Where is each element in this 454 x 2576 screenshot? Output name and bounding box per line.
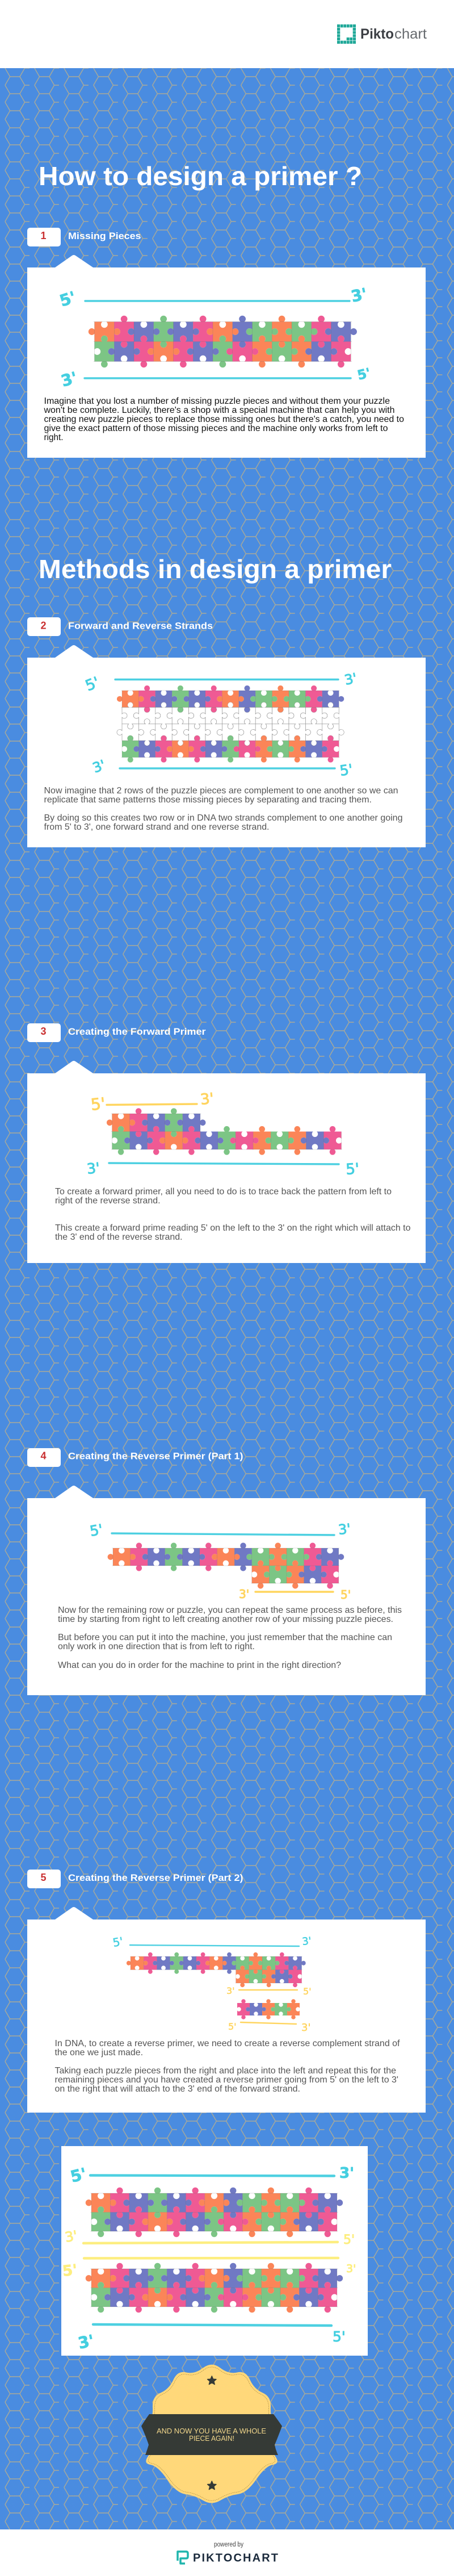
number badge 1: 1	[40, 230, 47, 241]
label 5 prime top left: 5'	[83, 674, 102, 695]
dashed stitching on seal	[148, 2367, 275, 2500]
strand line bottom	[85, 377, 351, 379]
strand line cyan	[130, 1945, 299, 1946]
primer line yellow	[255, 1591, 333, 1593]
label 3 prime yellow: 3'	[226, 1985, 235, 1996]
strand line cyan	[109, 1163, 339, 1164]
label 3 prime cyan: 3'	[338, 1521, 351, 1538]
description text	[44, 786, 403, 832]
icon: star bottom	[208, 2481, 216, 2490]
description text	[58, 1605, 402, 1670]
description text	[55, 1187, 411, 1242]
panel card	[61, 2146, 368, 2356]
label 5 prime top left: 5'	[69, 2164, 89, 2186]
wordmark: chart	[394, 26, 427, 42]
puzzle rows	[108, 1542, 344, 1589]
reversed primer pieces	[237, 1999, 300, 2019]
title: Methods in design a primer: Methods in design a primer	[39, 554, 392, 584]
strand line yellow lower	[84, 2257, 338, 2260]
title: How to design a primer: How to design a primer ?	[39, 161, 362, 191]
panel: creating the reverse primer part 2	[27, 1907, 426, 2113]
primer line yellow	[107, 1104, 197, 1105]
strand line top cyan	[90, 2175, 334, 2176]
PIKTOCHART wordmark: PIKTOCHART	[193, 2552, 278, 2565]
section 2 header	[27, 617, 213, 636]
number badge 2	[27, 617, 61, 636]
section 1 header	[27, 228, 141, 246]
description text: By doing so this creates two row or in DNA two strands complement to one another going	[44, 813, 403, 823]
badge message	[157, 2427, 266, 2443]
label 5 prime bottom right: 5'	[339, 761, 354, 779]
label 5 prime yellow: 5'	[340, 1588, 351, 1601]
description text: In DNA, to create a reverse primer, we need to create a reverse complement strand of	[54, 2039, 400, 2048]
label 3 prime top right: 3'	[350, 285, 369, 306]
puzzle diagram: forward primer	[86, 1090, 360, 1178]
label 5 prime cyan: 5'	[89, 1521, 104, 1540]
label 3 prime yellow: 3'	[239, 1587, 249, 1601]
description text: the 3' end of the reverse strand.	[55, 1232, 183, 1242]
header Piktochart logo	[337, 24, 427, 44]
number badge 2: 2	[40, 620, 47, 632]
label 5 prime top left: 5'	[57, 288, 78, 311]
icon: star top	[208, 2376, 216, 2385]
description text: the one we just made.	[54, 2048, 143, 2058]
strand line top	[85, 300, 350, 302]
label 5 prime yellow: 5'	[303, 1986, 312, 1997]
primer line yellow	[239, 1989, 297, 1990]
number badge 3	[27, 1023, 61, 1042]
final badge	[141, 2365, 282, 2503]
label 3 prime bottom left: 3'	[59, 368, 79, 391]
number badge 4: 4	[40, 1450, 47, 1462]
label 5 prime yellow: 5'	[90, 1094, 106, 1114]
strand line bottom cyan	[93, 2324, 331, 2326]
label 5 prime cyan: 5'	[112, 1934, 124, 1950]
white traced puzzle rows	[117, 702, 344, 746]
puzzle rows upper	[86, 2188, 343, 2237]
number badge 1	[27, 228, 61, 246]
icon: Piktochart P mark	[178, 2552, 188, 2564]
description text: only work in one direction that is from left to right.	[58, 1642, 255, 1651]
badge message: AND NOW YOU HAVE A WHOLE	[157, 2427, 266, 2435]
dark ribbon band	[141, 2414, 282, 2455]
label 3 prime top right: 3'	[339, 2165, 354, 2182]
coloured puzzle rows	[117, 685, 344, 763]
label 5 prime bottom right: 5'	[356, 366, 372, 383]
number badge 4	[27, 1448, 61, 1467]
label 3 prime cyan: 3'	[301, 1935, 312, 1948]
strand line yellow upper	[83, 2242, 338, 2243]
panel card with pointer	[27, 645, 426, 847]
footer: powered by Piktochart	[178, 2541, 278, 2565]
description text: won't be complete. Luckily, there's a shop with a special machine that can help you with	[43, 405, 395, 415]
panel: forward and reverse strands	[27, 645, 426, 847]
number badge 5: 5	[40, 1872, 47, 1883]
description text: replicate that same patterns those missing pieces by separating and tracing them.	[44, 795, 372, 805]
puzzle diagram: reverse complement	[112, 1934, 312, 2034]
panel: creating the forward primer	[27, 1061, 426, 1263]
label 3 prime top right: 3'	[343, 670, 359, 688]
section 3 header	[27, 1023, 206, 1042]
panel card with pointer	[27, 1907, 426, 2113]
label 5 prime bottom right: 5'	[333, 2328, 346, 2345]
strand line bottom	[120, 767, 335, 770]
description text: from 5' to 3', one forward strand and one reverse strand.	[44, 822, 269, 832]
description text: But before you can put it into the machine, you just remember that the machine can	[58, 1633, 392, 1642]
label 3 prime yellow: 3'	[200, 1090, 215, 1109]
section 1 heading: Missing Pieces	[68, 231, 141, 241]
label 5 prime yellow lower: 5'	[62, 2261, 78, 2280]
description text: remaining pieces and you have created a reverse primer going from 5' on the left to 3'	[54, 2075, 398, 2085]
label 5 prime yellow: 5'	[343, 2233, 355, 2247]
yellow scalloped seal	[145, 2365, 278, 2503]
description text: Now imagine that 2 rows of the puzzle pieces are complement to one another so we can	[44, 786, 398, 796]
label 3 prime bottom left: 3'	[90, 757, 108, 776]
powered by: powered by	[214, 2541, 243, 2548]
puzzle diagram: separated strands	[83, 670, 359, 779]
label 3 prime lower yellow: 3'	[301, 2022, 310, 2034]
puzzle diagram: reverse primer	[89, 1521, 351, 1601]
puzzle rows lower	[86, 2263, 343, 2312]
description text	[43, 396, 404, 442]
description text: creating new puzzle pieces to replace those missing ones but there's a catch, you need to	[44, 415, 404, 424]
icon: Piktochart grid mark	[337, 24, 356, 44]
section 5 header	[27, 1870, 243, 1888]
description text: Taking each puzzle pieces from the right and place into the left and repeat this for the	[54, 2066, 396, 2076]
section 2 heading: Forward and Reverse Strands	[68, 620, 213, 632]
description text: right of the reverse strand.	[55, 1196, 160, 1206]
section 5 heading: Creating the Reverse Primer (Part 2)	[68, 1872, 243, 1883]
description text	[54, 2039, 400, 2094]
panel: completed puzzle	[61, 2146, 368, 2356]
label 5 prime lower yellow: 5'	[228, 2021, 237, 2032]
panel card with pointer	[27, 1061, 426, 1263]
puzzle rows	[127, 1952, 306, 1987]
section 4 heading: Creating the Reverse Primer (Part 1)	[68, 1450, 243, 1462]
panel: creating the reverse primer part 1	[27, 1486, 426, 1695]
label 3 prime yellow: 3'	[64, 2228, 79, 2245]
number badge 5	[27, 1870, 61, 1888]
section 3 heading: Creating the Forward Primer	[68, 1026, 206, 1037]
puzzle rows	[89, 316, 357, 367]
description text: right.	[44, 433, 64, 442]
label 5 prime cyan: 5'	[345, 1160, 360, 1178]
puzzle rows	[107, 1108, 342, 1155]
strand line cyan	[112, 1533, 334, 1535]
description text: Imagine that you lost a number of missing puzzle pieces and without them your puzzle	[44, 396, 390, 406]
description text: This create a forward prime reading 5' on the left to the 3' on the right which will attach to	[55, 1223, 411, 1233]
description text: on the right that will attach to the 3' end of the forward strand.	[54, 2084, 300, 2094]
label 3 prime bottom left: 3'	[77, 2331, 96, 2353]
badge message: PIECE AGAIN!	[189, 2434, 234, 2443]
label 3 prime cyan: 3'	[86, 1160, 100, 1177]
panel card with pointer	[27, 255, 426, 458]
description text: give the exact pattern of those missing pieces and the machine only works from left to	[44, 424, 388, 433]
label 3 prime yellow lower: 3'	[346, 2263, 356, 2275]
number badge 3: 3	[40, 1026, 47, 1037]
description text: To create a forward primer, all you need to do is to trace back the pattern from left to	[55, 1187, 392, 1197]
wordmark: Pikto	[360, 26, 394, 42]
description text: Now for the remaining row or puzzle, you can repeat the same process as before, this	[58, 1605, 402, 1615]
strand line top	[115, 679, 338, 680]
panel: missing pieces	[27, 255, 426, 458]
section 4 header	[27, 1448, 243, 1467]
panel card with pointer	[27, 1486, 426, 1695]
reversed primer line yellow	[241, 2022, 296, 2024]
puzzle diagram: two strands	[57, 285, 372, 391]
description text: time by starting from right to left creating another row of your missing puzzle pieces.	[58, 1615, 393, 1624]
description text: What can you do in order for the machine to print in the right direction?	[58, 1661, 341, 1670]
